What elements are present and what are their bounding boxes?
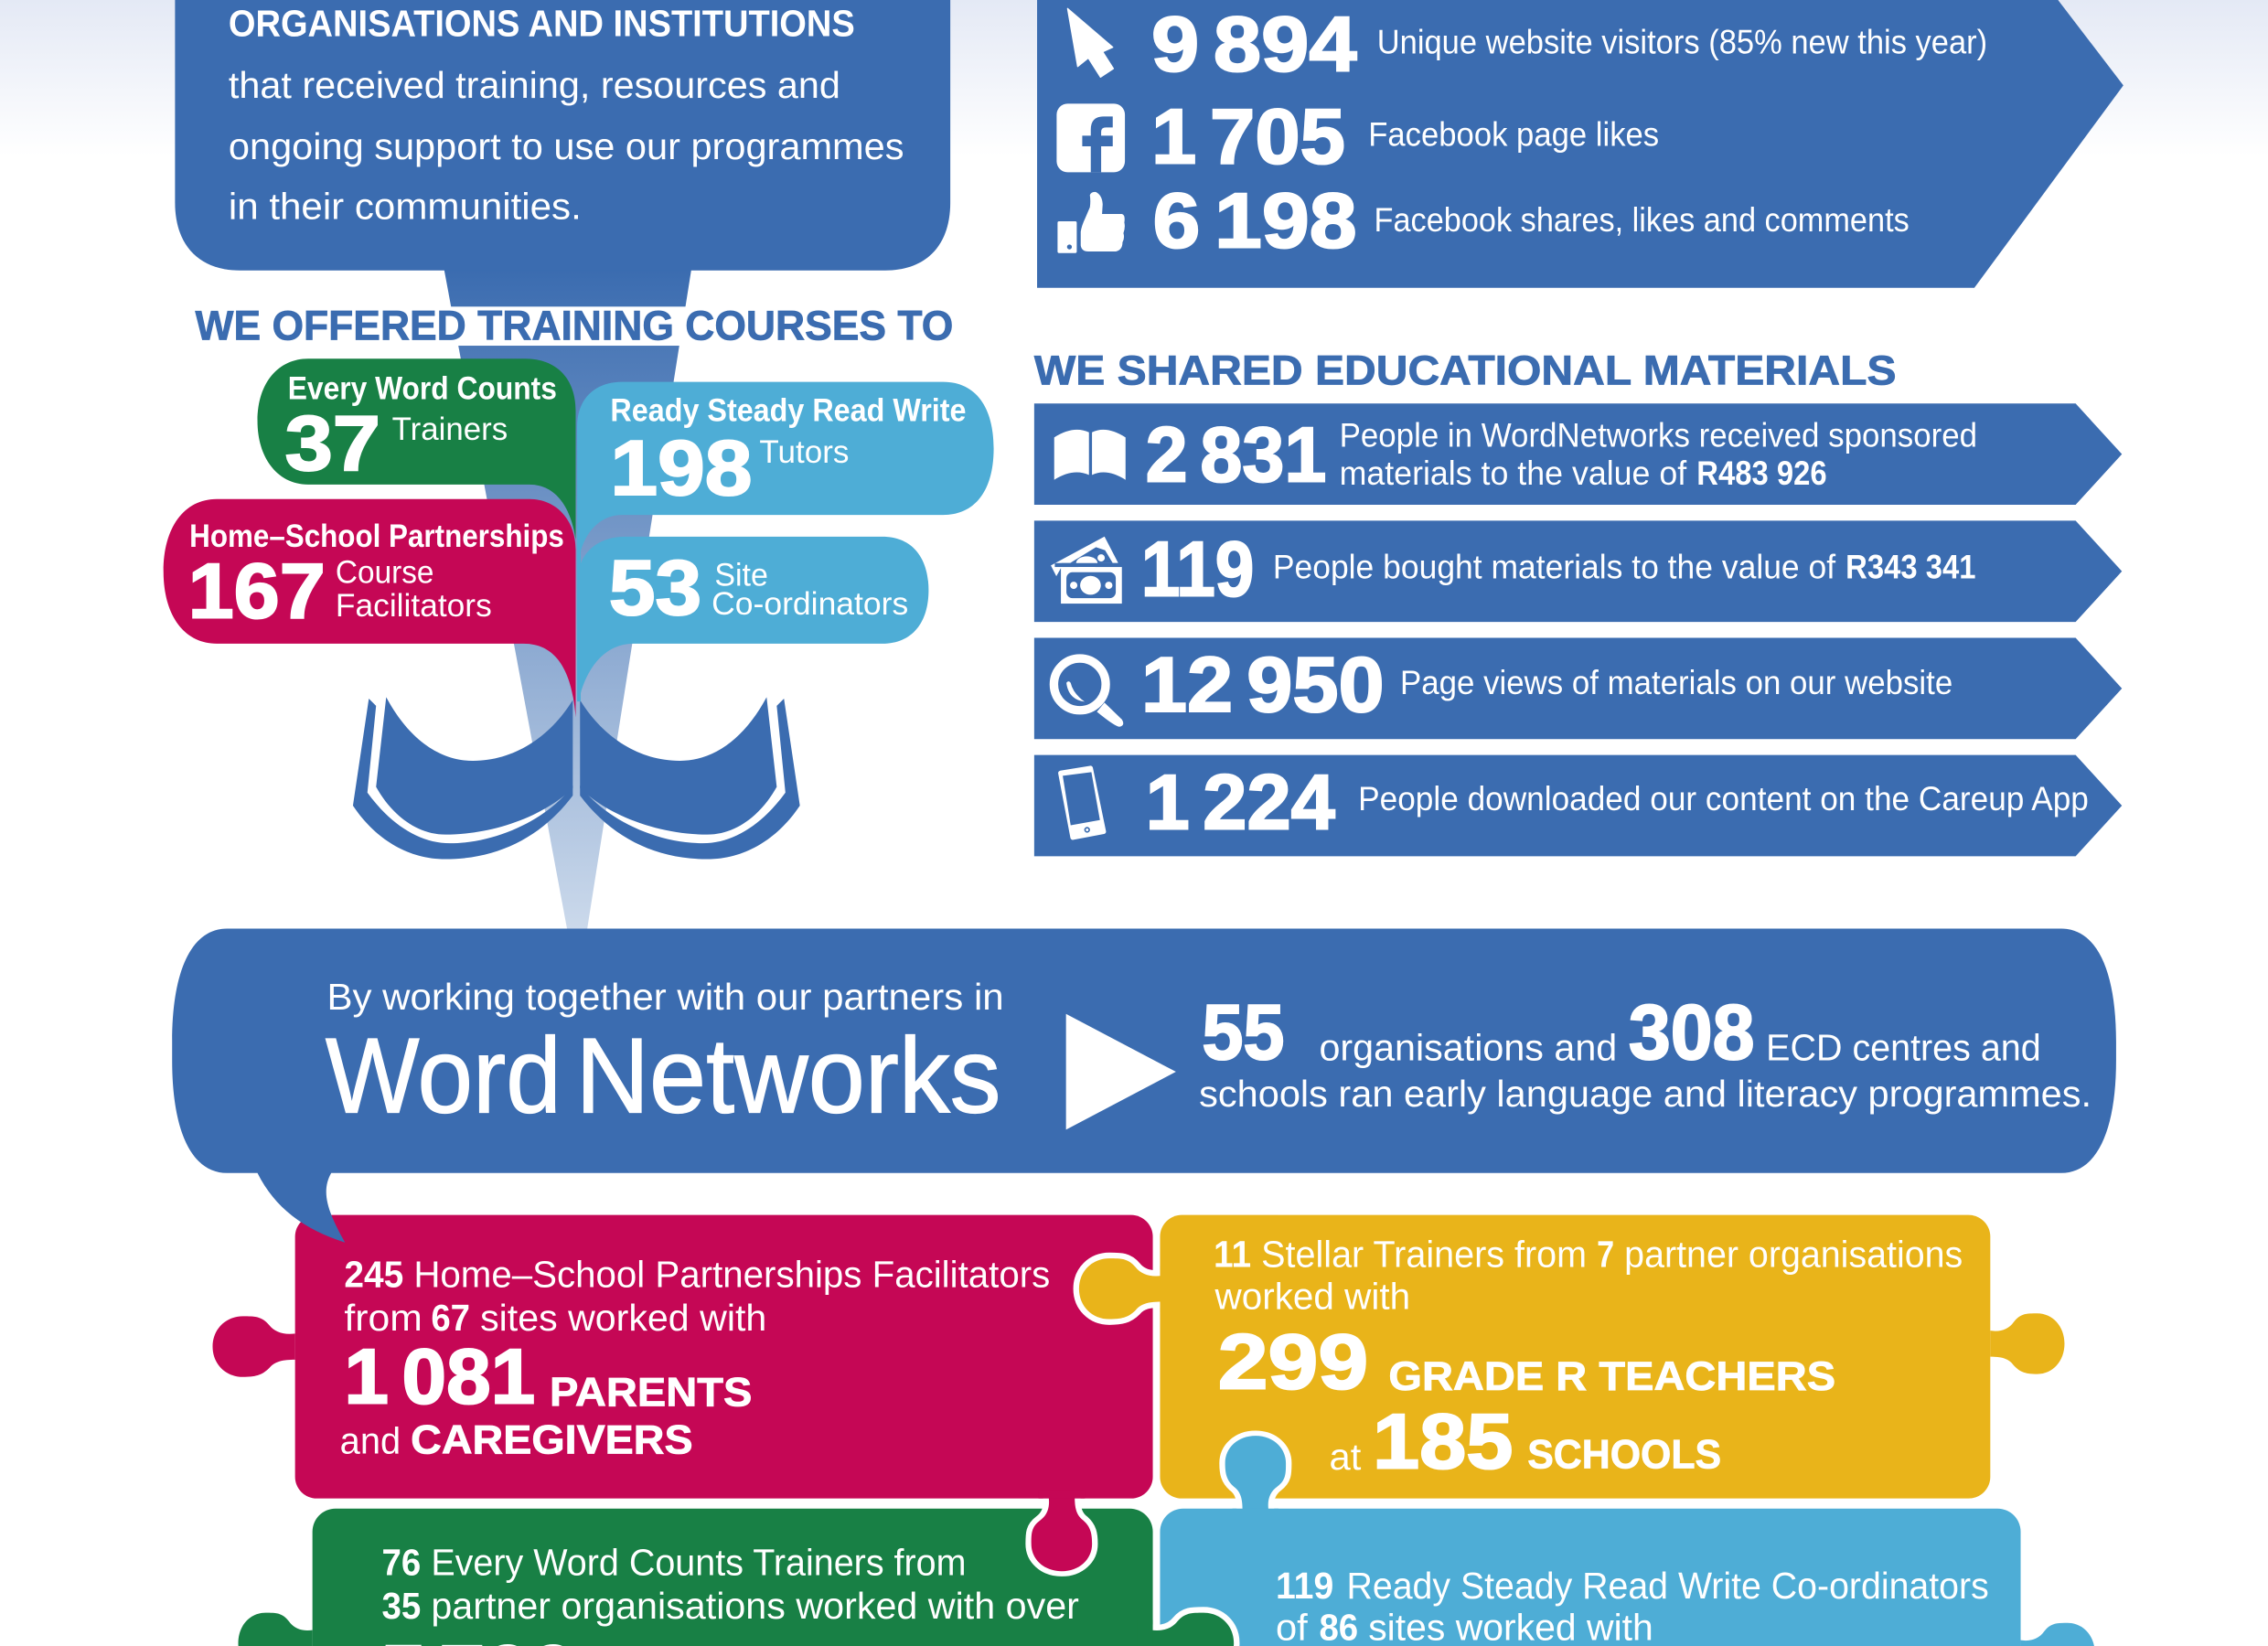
logo: WordNetworks: Networks: [575, 1015, 1000, 1135]
callout: Home-School Partnerships facilitators: 167: [188, 548, 326, 635]
arrow: app downloads: 1 224: [1146, 759, 1335, 846]
panel: online reach arrow: Facebook page likes: [1368, 115, 1659, 154]
icon: book: [1054, 430, 1126, 480]
puzzle piece: Ready Steady Read Write: [1160, 1509, 2095, 1646]
arrow: sponsored materials: R483 926: [1696, 454, 1827, 492]
puzzle piece: Every Word Counts: partner organisations worked with over: [431, 1585, 1079, 1627]
arrow: sponsored materials: materials to the value of: [1340, 454, 1687, 492]
panel: WordNetworks partners bubble: 308: [1629, 989, 1755, 1076]
puzzle piece: Stellar Trainers: 7: [1597, 1234, 1614, 1276]
panel: WordNetworks partners bubble: [172, 928, 2116, 1243]
puzzle piece: Every Word Counts: Every Word Counts Trainers from: [431, 1541, 967, 1583]
callout: Ready Steady Read Write tutors: [577, 382, 994, 701]
arrow: page views: Page views of materials on our website: [1400, 663, 1952, 701]
arrow: sponsored materials: [1034, 403, 2122, 505]
callout: site co-ordinators: 53: [609, 545, 701, 632]
arrow: bought materials: 119: [1141, 527, 1254, 614]
callout: Every Word Counts trainers: 37: [285, 401, 380, 487]
puzzle piece: Home-School Partnerships: [212, 1215, 1153, 1571]
callout: Every Word Counts trainers: Every Word Counts: [288, 372, 557, 407]
puzzle piece: Home-School Partnerships: sites worked with: [480, 1297, 766, 1339]
logo: WordNetworks: [326, 1015, 1000, 1135]
puzzle piece: Stellar Trainers: 299: [1218, 1319, 1368, 1406]
puzzle piece: Every Word Counts: 35: [382, 1585, 421, 1627]
panel: online reach arrow: 9 894: [1151, 2, 1357, 89]
arrow: bought materials: [1034, 520, 2122, 622]
panel: online reach arrow: 6 198: [1153, 177, 1357, 264]
panel: online reach arrow: 1 705: [1151, 94, 1345, 181]
arrow: page views: [1034, 638, 2122, 739]
puzzle piece: Stellar Trainers: 11: [1214, 1234, 1251, 1276]
puzzle piece: Stellar Trainers: 185: [1373, 1398, 1513, 1485]
callout: Home-School Partnerships facilitators: [164, 499, 575, 718]
puzzle piece: Every Word Counts: 76: [382, 1541, 421, 1583]
puzzle piece: Home-School Partnerships: and: [340, 1420, 401, 1462]
puzzle piece: Home-School Partnerships: 245: [344, 1254, 403, 1296]
panel: organisations and institutions: in their communities.: [229, 186, 582, 228]
arrow: app downloads: [1034, 755, 2122, 856]
arrow: sponsored materials: People in WordNetworks received sponsored: [1340, 416, 1977, 454]
callout: Every Word Counts trainers: [258, 358, 575, 540]
panel: organisations and institutions: ongoing support to use our programmes: [229, 125, 904, 167]
puzzle piece: Stellar Trainers: worked with: [1214, 1275, 1410, 1317]
panel: WordNetworks partners bubble: By working together with our partners in: [326, 976, 1004, 1018]
heading: educational materials: WE SHARED EDUCATIONAL MATERIALS: [1034, 347, 1897, 394]
arrow: play triangle: [1066, 1014, 1176, 1129]
puzzle tab: green into blue: [1137, 1613, 1234, 1646]
puzzle piece: Home-School Partnerships: CAREGIVERS: [411, 1418, 693, 1463]
panel: WordNetworks partners bubble: organisations and: [1319, 1026, 1617, 1068]
arrow: bought materials: R343 341: [1845, 548, 1976, 586]
callout: Home-School Partnerships facilitators: Facilitators: [336, 589, 492, 624]
puzzle piece: Home-School Partnerships: PARENTS: [550, 1370, 752, 1415]
puzzle piece: Ready Steady Read Write: 119: [1276, 1565, 1333, 1607]
callout: Ready Steady Read Write tutors: Tutors: [759, 435, 849, 470]
callout: site co-ordinators: Site: [714, 559, 768, 593]
puzzle piece: Stellar Trainers: SCHOOLS: [1527, 1432, 1721, 1477]
icon: facebook: [1056, 103, 1125, 172]
panel: online reach arrow: Unique website visitors (85% new this year): [1377, 23, 1987, 61]
panel: WordNetworks partners bubble: ECD centres and: [1766, 1026, 2041, 1068]
icon: phone: [1061, 768, 1104, 838]
puzzle piece: Stellar Trainers: [1079, 1215, 2064, 1499]
callout: site co-ordinators: Co-ordinators: [711, 587, 908, 622]
icon: open book: [353, 697, 800, 860]
puzzle piece: Stellar Trainers: Stellar Trainers from: [1261, 1234, 1587, 1276]
puzzle piece: Stellar Trainers: partner organisations: [1624, 1234, 1963, 1276]
panel: organisations and institutions: ORGANISATIONS AND INSTITUTIONS: [229, 3, 855, 45]
panel: organisations and institutions: [175, 0, 950, 271]
panel: organisations and institutions: that received training, resources and: [229, 64, 840, 106]
puzzle piece: Home-School Partnerships: Home–School Partnerships Facilitators: [413, 1254, 1050, 1296]
funnel connecting organisations bubble to partners: [444, 269, 691, 928]
arrow: bought materials: People bought materials to the value of: [1273, 548, 1836, 586]
panel: online reach arrow: [1037, 0, 2124, 288]
puzzle piece: Stellar Trainers: at: [1330, 1436, 1362, 1478]
puzzle piece: Ready Steady Read Write: Ready Steady Read Write Co-ordinators: [1347, 1565, 1989, 1607]
puzzle piece: Stellar Trainers: GRADE R TEACHERS: [1388, 1354, 1835, 1399]
heading: training courses: WE OFFERED TRAINING COURSES TO: [196, 302, 953, 349]
callout: Home-School Partnerships facilitators: Home–School Partnerships: [189, 519, 564, 554]
logo: WordNetworks: Word: [326, 1015, 562, 1135]
icon: magnifier: [1054, 658, 1123, 727]
callout: site co-ordinators: [579, 537, 928, 701]
arrow: sponsored materials: 2 831: [1146, 412, 1326, 499]
panel: WordNetworks partners bubble: 55: [1202, 989, 1284, 1076]
puzzle tab: blue into yellow: [1225, 1436, 1286, 1522]
icon: thumbs up: [1057, 192, 1125, 253]
callout: Ready Steady Read Write tutors: Ready Steady Read Write: [610, 393, 967, 428]
callout: Ready Steady Read Write tutors: 198: [610, 425, 752, 512]
icon: cursor: [1067, 8, 1113, 77]
panel: online reach arrow: Facebook shares, likes and comments: [1375, 200, 1910, 239]
arrow: app downloads: People downloaded our content on the Careup App: [1358, 779, 2089, 818]
icon: money: [1051, 537, 1122, 604]
puzzle piece: Home-School Partnerships: 1 081: [344, 1333, 535, 1420]
callout: Every Word Counts trainers: Trainers: [392, 412, 508, 447]
puzzle piece: Home-School Partnerships: from: [344, 1297, 423, 1339]
callout: Home-School Partnerships facilitators: Course: [336, 555, 433, 590]
puzzle piece: Home-School Partnerships: 67: [431, 1297, 470, 1339]
puzzle piece: Every Word Counts: [238, 1509, 1153, 1646]
panel: WordNetworks partners bubble: schools ran early language and literacy programmes.: [1199, 1073, 2091, 1115]
arrow: page views: 12 950: [1141, 642, 1385, 729]
